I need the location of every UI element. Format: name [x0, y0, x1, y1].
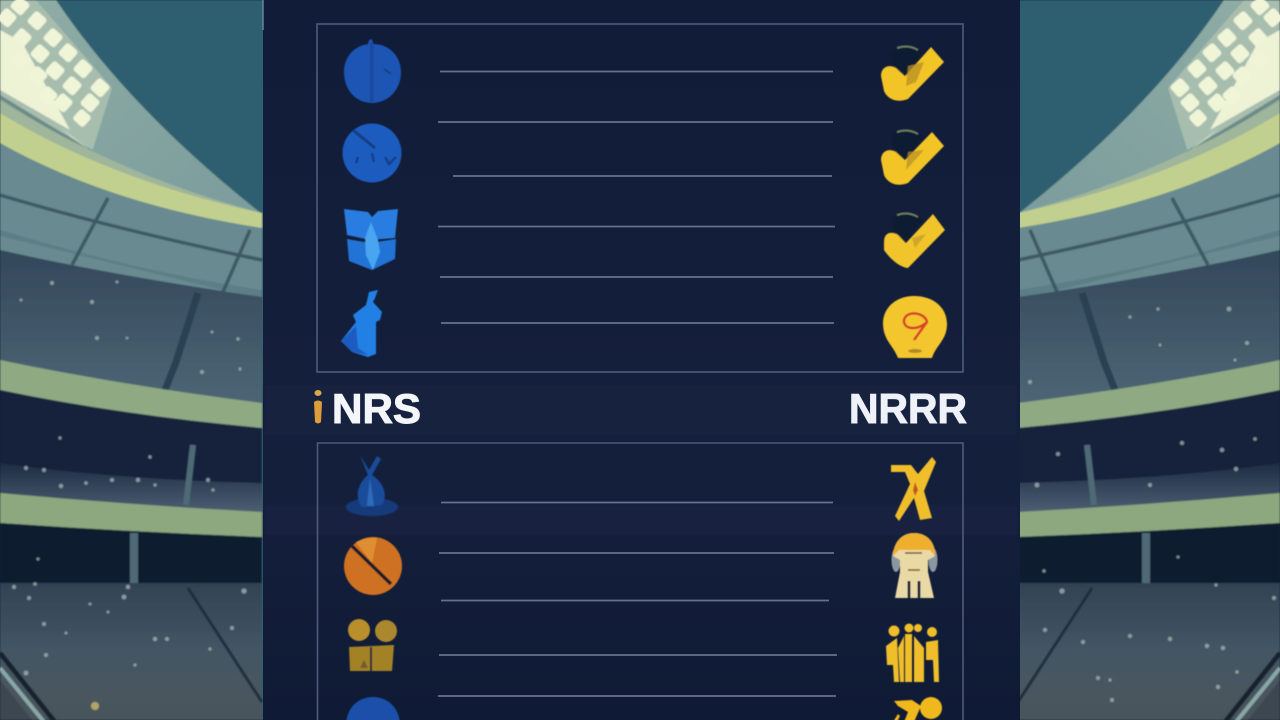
- icon: yellow check 2: [881, 130, 944, 185]
- icon: yellow head figure: [892, 533, 938, 598]
- panel: upper list frame: [317, 24, 963, 372]
- icon: yellow check 1: [881, 46, 944, 101]
- icon: yellow apple with red nine: [883, 296, 947, 358]
- panel: central navy board: [262, 0, 1020, 720]
- heading: iNRS: NRS: [332, 385, 421, 432]
- icon: blue clock circle: [342, 124, 402, 182]
- icon: yellow group of people: [886, 624, 939, 682]
- crowd dots: right: [1028, 307, 1276, 702]
- blank text lines: lower list: [438, 502, 837, 696]
- icon: blue divided circle: [344, 39, 401, 103]
- icon: yellow check 3: [884, 213, 945, 268]
- heading: NRRR: NRRR: [849, 385, 967, 432]
- icon: orange banned circle: [344, 537, 402, 595]
- icon: blue dome partial: [346, 697, 400, 720]
- blank text lines: upper list: [438, 72, 835, 323]
- icon: yellow crossed X: [891, 457, 936, 521]
- icon: two gold figures with box: [348, 619, 397, 671]
- panel: lower list frame: [318, 443, 963, 720]
- icon: blue knotted sack: [346, 455, 398, 516]
- icon: blue figure: [341, 290, 382, 357]
- icon: yellow runner partial: [893, 697, 942, 720]
- background: right stadium stands: [1010, 0, 1280, 720]
- crowd dots: left: [12, 280, 247, 675]
- icon: blue shield book: [344, 209, 398, 270]
- background: left stadium stands: [0, 0, 270, 720]
